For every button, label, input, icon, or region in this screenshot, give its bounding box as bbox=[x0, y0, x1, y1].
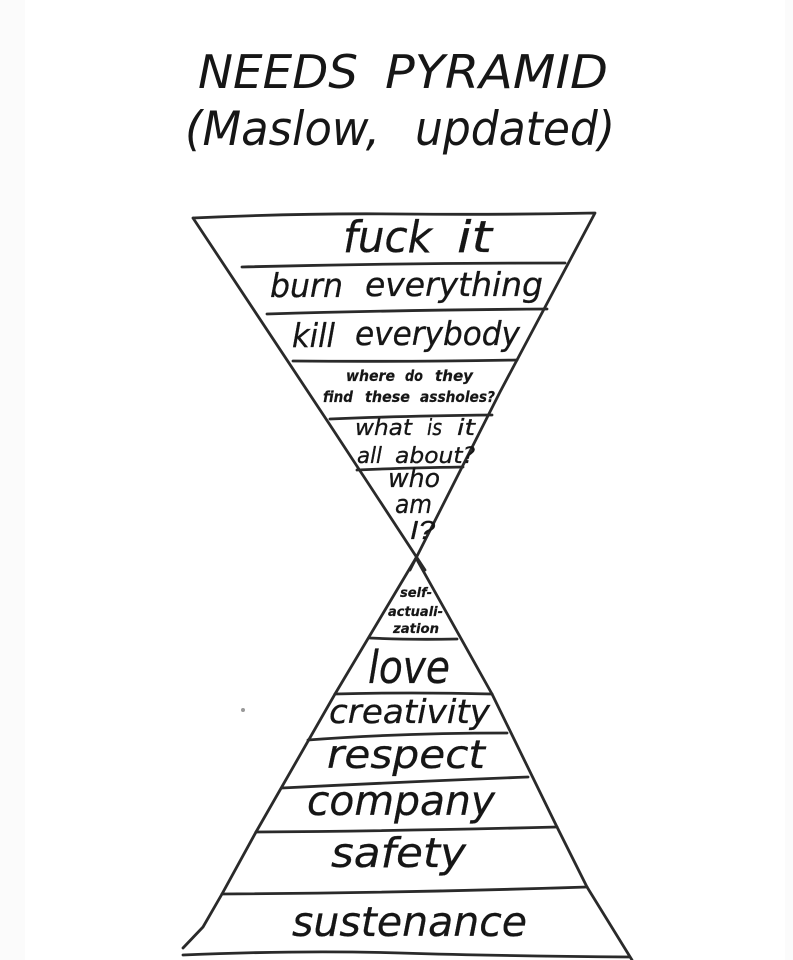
tier: where do they find these assholes: these bbox=[365, 388, 410, 406]
tier: kill everybody: everybody bbox=[355, 314, 520, 353]
tier: company: company bbox=[307, 777, 496, 825]
tier: where do they find these assholes bbox=[323, 367, 495, 419]
inverted pyramid bbox=[193, 212, 595, 570]
tier: self-actualization: self- bbox=[400, 586, 432, 601]
tier: love: love bbox=[368, 641, 450, 694]
tier: who am I bbox=[388, 464, 440, 545]
tier: where do they find these assholes: assholes? bbox=[420, 388, 495, 406]
tier: burn everything: everything bbox=[365, 265, 543, 304]
tier: fuck it bbox=[242, 212, 565, 267]
tier: respect bbox=[282, 733, 528, 788]
tier: what is it all about: is bbox=[427, 416, 442, 441]
tier: burn everything bbox=[267, 265, 547, 314]
tier: who am I: who bbox=[388, 464, 440, 494]
title: (Maslow, bbox=[185, 102, 380, 157]
title: updated) bbox=[415, 102, 615, 157]
tier: who am I: I? bbox=[410, 515, 436, 545]
title: NEEDS bbox=[198, 45, 358, 99]
tier: creativity: creativity bbox=[329, 692, 490, 731]
tier: what is it all about: what bbox=[355, 416, 413, 441]
upright pyramid outline bbox=[183, 558, 632, 960]
inverted pyramid outline bbox=[193, 213, 595, 570]
tier: burn everything: burn bbox=[270, 266, 343, 305]
tier: kill everybody bbox=[292, 314, 520, 361]
tier: self-actualization: zation bbox=[392, 622, 439, 637]
speck bbox=[241, 708, 245, 712]
tier: self-actualization: actuali- bbox=[388, 605, 443, 620]
tier: creativity bbox=[308, 692, 507, 740]
tier: kill everybody: kill bbox=[292, 316, 335, 355]
tier: where do they find these assholes: find bbox=[323, 388, 353, 406]
tier: where do they find these assholes: where bbox=[346, 367, 395, 385]
tier: fuck it: fuck bbox=[343, 212, 433, 263]
tier: sustenance: sustenance bbox=[292, 898, 527, 946]
tier: what is it all about: it bbox=[457, 416, 477, 441]
tier: what is it all about: all bbox=[357, 444, 382, 469]
tier: safety: safety bbox=[331, 829, 467, 877]
tier: respect: respect bbox=[327, 733, 487, 778]
tier: self-actualization bbox=[370, 586, 457, 639]
tier: safety bbox=[222, 829, 587, 894]
title: PYRAMID bbox=[385, 45, 608, 99]
tier: where do they find these assholes: they bbox=[435, 367, 474, 385]
tier: who am I: am bbox=[395, 490, 432, 520]
upright pyramid bbox=[183, 558, 632, 960]
title bbox=[185, 45, 615, 157]
tier: where do they find these assholes: do bbox=[405, 367, 423, 385]
tier: what is it all about bbox=[355, 416, 477, 470]
tier: fuck it: it bbox=[457, 212, 494, 263]
tier: what is it all about: about? bbox=[395, 444, 475, 469]
tier: company bbox=[256, 777, 557, 832]
